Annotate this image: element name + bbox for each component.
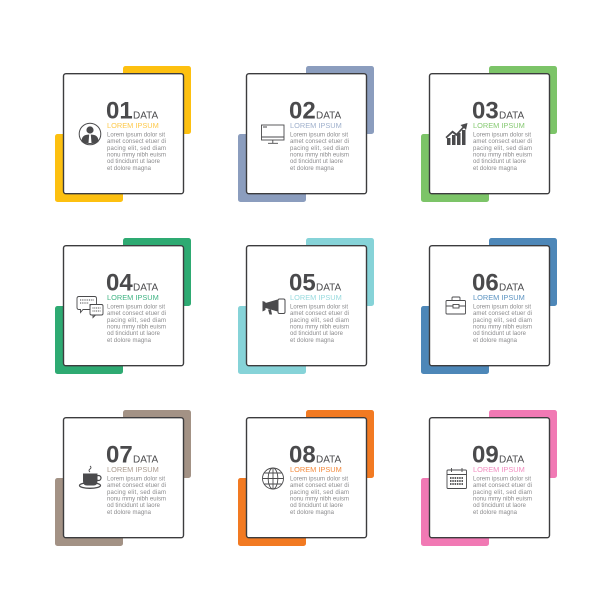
heading: 07 DATA [106, 442, 159, 468]
text block: od tincidunt ut laore [473, 503, 527, 509]
text block: Lorem ipsum dolor sit [290, 132, 348, 138]
text block [473, 132, 532, 172]
text block: Lorem ipsum dolor sit [473, 304, 531, 310]
heading: 08 DATA: 08 [289, 442, 316, 468]
panel: card 03 [421, 66, 557, 202]
subheading: LOREM IPSUM [107, 121, 159, 130]
heading: 05 DATA [289, 270, 342, 296]
heading: 01 DATA [106, 98, 159, 124]
subheading: LOREM IPSUM [473, 465, 525, 474]
text block: amet consect etuer di [290, 139, 349, 145]
text block: nonu mmy nibh euism [290, 324, 349, 330]
subheading: LOREM IPSUM [473, 293, 525, 302]
text block: pacing elit, sed diam [107, 490, 166, 496]
text block [290, 304, 349, 344]
subheading: LOREM IPSUM [290, 293, 342, 302]
icon: globe [262, 468, 284, 489]
heading: 06 DATA [472, 270, 525, 296]
text block: pacing elit, sed diam [107, 146, 166, 152]
text block [107, 304, 166, 344]
heading: 04 DATA: 04 [106, 270, 133, 296]
text block: amet consect etuer di [107, 483, 166, 489]
panel: card 05 [238, 238, 374, 374]
text block: Lorem ipsum dolor sit [290, 304, 348, 310]
heading: 02 DATA: DATA [316, 110, 342, 122]
icon: briefcase [446, 297, 466, 314]
text block: pacing elit, sed diam [290, 490, 349, 496]
text block: amet consect etuer di [290, 483, 349, 489]
panel: card 02 [238, 66, 374, 202]
heading: 02 DATA [289, 98, 342, 124]
icon: calendar [447, 468, 466, 488]
text block: nonu mmy nibh euism [290, 496, 349, 502]
text block [107, 476, 166, 516]
icon: speech bubbles [77, 296, 103, 318]
icon: businessman [79, 123, 101, 145]
text block: nonu mmy nibh euism [473, 496, 532, 502]
text block: od tincidunt ut laore [473, 331, 527, 337]
text block: pacing elit, sed diam [473, 318, 532, 324]
heading: 05 DATA: 05 [289, 270, 316, 296]
heading: 02 DATA: 02 [289, 98, 316, 124]
text block [473, 304, 532, 344]
icon: coffee cup [80, 466, 101, 488]
text block [107, 132, 166, 172]
text block: nonu mmy nibh euism [107, 496, 166, 502]
heading: 03 DATA: DATA [499, 110, 525, 122]
text block: nonu mmy nibh euism [290, 152, 349, 158]
heading: 05 DATA: DATA [316, 282, 342, 294]
text block: et dolore magna [473, 338, 518, 344]
subheading: LOREM IPSUM [290, 121, 342, 130]
panel: card 07 [55, 410, 191, 546]
panel: card 09 [421, 410, 557, 546]
text block [290, 132, 349, 172]
text block: Lorem ipsum dolor sit [107, 132, 165, 138]
text block: et dolore magna [290, 510, 335, 516]
text block: nonu mmy nibh euism [473, 324, 532, 330]
text block: od tincidunt ut laore [107, 331, 161, 337]
text block: pacing elit, sed diam [290, 146, 349, 152]
text block [473, 476, 532, 516]
text block: Lorem ipsum dolor sit [290, 476, 348, 482]
heading: 01 DATA: 01 [106, 98, 133, 124]
text block: et dolore magna [473, 510, 518, 516]
heading: 01 DATA: DATA [133, 110, 159, 122]
heading: 04 DATA: DATA [133, 282, 159, 294]
heading: 03 DATA: 03 [472, 98, 499, 124]
text block: nonu mmy nibh euism [107, 324, 166, 330]
text block: Lorem ipsum dolor sit [107, 304, 165, 310]
heading: 08 DATA [289, 442, 342, 468]
text block: et dolore magna [107, 338, 152, 344]
text block [290, 476, 349, 516]
text block: amet consect etuer di [473, 311, 532, 317]
text block: pacing elit, sed diam [473, 146, 532, 152]
text block: amet consect etuer di [107, 311, 166, 317]
heading: 03 DATA [472, 98, 525, 124]
text block: amet consect etuer di [107, 139, 166, 145]
subheading: LOREM IPSUM [107, 465, 159, 474]
panel: card 06 [421, 238, 557, 374]
text block: et dolore magna [473, 166, 518, 172]
text block: od tincidunt ut laore [107, 159, 161, 165]
text block: amet consect etuer di [290, 311, 349, 317]
heading: 09 DATA: DATA [499, 454, 525, 466]
text block: amet consect etuer di [473, 483, 532, 489]
text block: od tincidunt ut laore [290, 331, 344, 337]
panel: card 04 [55, 238, 191, 374]
heading: 06 DATA: 06 [472, 270, 499, 296]
text block: Lorem ipsum dolor sit [107, 476, 165, 482]
text block: od tincidunt ut laore [290, 159, 344, 165]
text block: od tincidunt ut laore [107, 503, 161, 509]
heading: 09 DATA: 09 [472, 442, 499, 468]
text block: et dolore magna [107, 510, 152, 516]
heading: 06 DATA: DATA [499, 282, 525, 294]
icon: monitor [262, 125, 284, 143]
heading: 08 DATA: DATA [316, 454, 342, 466]
text block: pacing elit, sed diam [107, 318, 166, 324]
text block: Lorem ipsum dolor sit [473, 476, 531, 482]
heading: 07 DATA: DATA [133, 454, 159, 466]
heading: 09 DATA [472, 442, 525, 468]
text block: nonu mmy nibh euism [473, 152, 532, 158]
text block: et dolore magna [290, 166, 335, 172]
text block: pacing elit, sed diam [290, 318, 349, 324]
text block: Lorem ipsum dolor sit [473, 132, 531, 138]
text block: et dolore magna [107, 166, 152, 172]
subheading: LOREM IPSUM [473, 121, 525, 130]
subheading: LOREM IPSUM [290, 465, 342, 474]
icon: megaphone [262, 299, 285, 314]
heading: 04 DATA [106, 270, 159, 296]
heading: 07 DATA: 07 [106, 442, 133, 468]
panel: card 08 [238, 410, 374, 546]
subheading: LOREM IPSUM [107, 293, 159, 302]
text block: od tincidunt ut laore [473, 159, 527, 165]
text block: et dolore magna [290, 338, 335, 344]
panel: card 01 [55, 66, 191, 202]
text block: amet consect etuer di [473, 139, 532, 145]
text block: pacing elit, sed diam [473, 490, 532, 496]
icon: rising chart [446, 123, 468, 145]
text block: od tincidunt ut laore [290, 503, 344, 509]
text block: nonu mmy nibh euism [107, 152, 166, 158]
